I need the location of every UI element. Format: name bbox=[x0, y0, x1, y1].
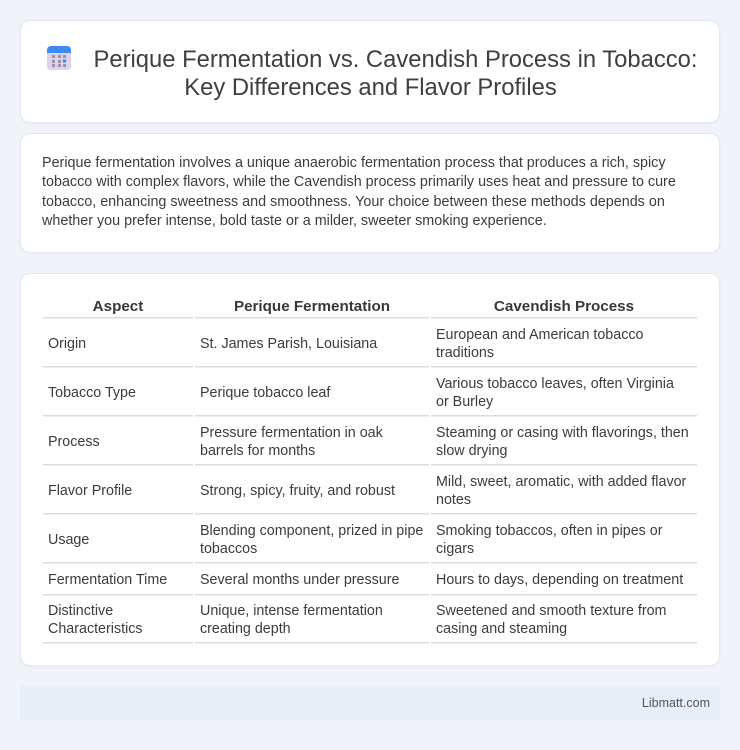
panel: title card bbox=[20, 20, 720, 123]
text: Perique tobacco leaf bbox=[200, 385, 330, 401]
summary text bbox=[42, 155, 676, 229]
text: Several months under pressure bbox=[200, 572, 399, 588]
text: Unique, intense fermentation bbox=[200, 603, 383, 619]
text: slow drying bbox=[436, 443, 508, 459]
summary text: tobacco with complex flavors, while the Cavendish process primarily uses heat and pressure to cure bbox=[42, 174, 676, 190]
summary text: whether you prefer intense, bold taste or a milder, sweeter smoking experience. bbox=[42, 213, 547, 229]
summary text: Perique fermentation involves a unique anaerobic fermentation process that produces a rich, spicy bbox=[42, 155, 666, 171]
row: Fermentation Time: Fermentation Time bbox=[48, 572, 167, 588]
text: cigars bbox=[436, 541, 474, 557]
text: European and American tobacco bbox=[436, 327, 643, 343]
icon: calendar bbox=[47, 46, 71, 70]
footer bar bbox=[20, 686, 720, 720]
table header: Cavendish Process: Cavendish Process bbox=[494, 298, 634, 315]
title: Perique Fermentation vs. Cavendish Process in Tobacco: bbox=[93, 46, 698, 73]
text: tobaccos bbox=[200, 541, 257, 557]
text: Smoking tobaccos, often in pipes or bbox=[436, 523, 662, 539]
row: Flavor Profile: Flavor Profile bbox=[48, 483, 132, 499]
text: St. James Parish, Louisiana bbox=[200, 336, 377, 352]
row: Distinctive Characteristics bbox=[48, 603, 143, 637]
text: Blending component, prized in pipe bbox=[200, 523, 423, 539]
title bbox=[93, 46, 698, 101]
text: traditions bbox=[436, 345, 494, 361]
title: Key Differences and Flavor Profiles bbox=[184, 74, 557, 101]
footer credit: Libmatt.com bbox=[642, 696, 710, 710]
panel: comparison table card bbox=[20, 273, 720, 666]
text: or Burley bbox=[436, 394, 493, 410]
summary text: tobacco, enhancing sweetness and smoothness. Your choice between these methods depends on bbox=[42, 194, 665, 210]
text: notes bbox=[436, 492, 471, 508]
table header: Aspect: Aspect bbox=[93, 298, 143, 315]
text: Strong, spicy, fruity, and robust bbox=[200, 483, 395, 499]
text: Mild, sweet, aromatic, with added flavor bbox=[436, 474, 686, 490]
row: Process: Process bbox=[48, 434, 100, 450]
text: Hours to days, depending on treatment bbox=[436, 572, 683, 588]
row: Usage: Usage bbox=[48, 532, 89, 548]
text: Pressure fermentation in oak bbox=[200, 425, 383, 441]
row: Distinctive Characteristics: Characteristics bbox=[48, 621, 143, 637]
table header: Perique Fermentation: Perique Fermentation bbox=[234, 298, 390, 315]
text: creating depth bbox=[200, 621, 291, 637]
text: Various tobacco leaves, often Virginia bbox=[436, 376, 674, 392]
panel: summary card bbox=[20, 133, 720, 253]
row: Origin: Origin bbox=[48, 336, 86, 352]
text: Steaming or casing with flavorings, then bbox=[436, 425, 689, 441]
text: barrels for months bbox=[200, 443, 315, 459]
row: Tobacco Type: Tobacco Type bbox=[48, 385, 136, 401]
row: Distinctive Characteristics: Distinctive bbox=[48, 603, 113, 619]
text: Sweetened and smooth texture from bbox=[436, 603, 666, 619]
text: casing and steaming bbox=[436, 621, 567, 637]
